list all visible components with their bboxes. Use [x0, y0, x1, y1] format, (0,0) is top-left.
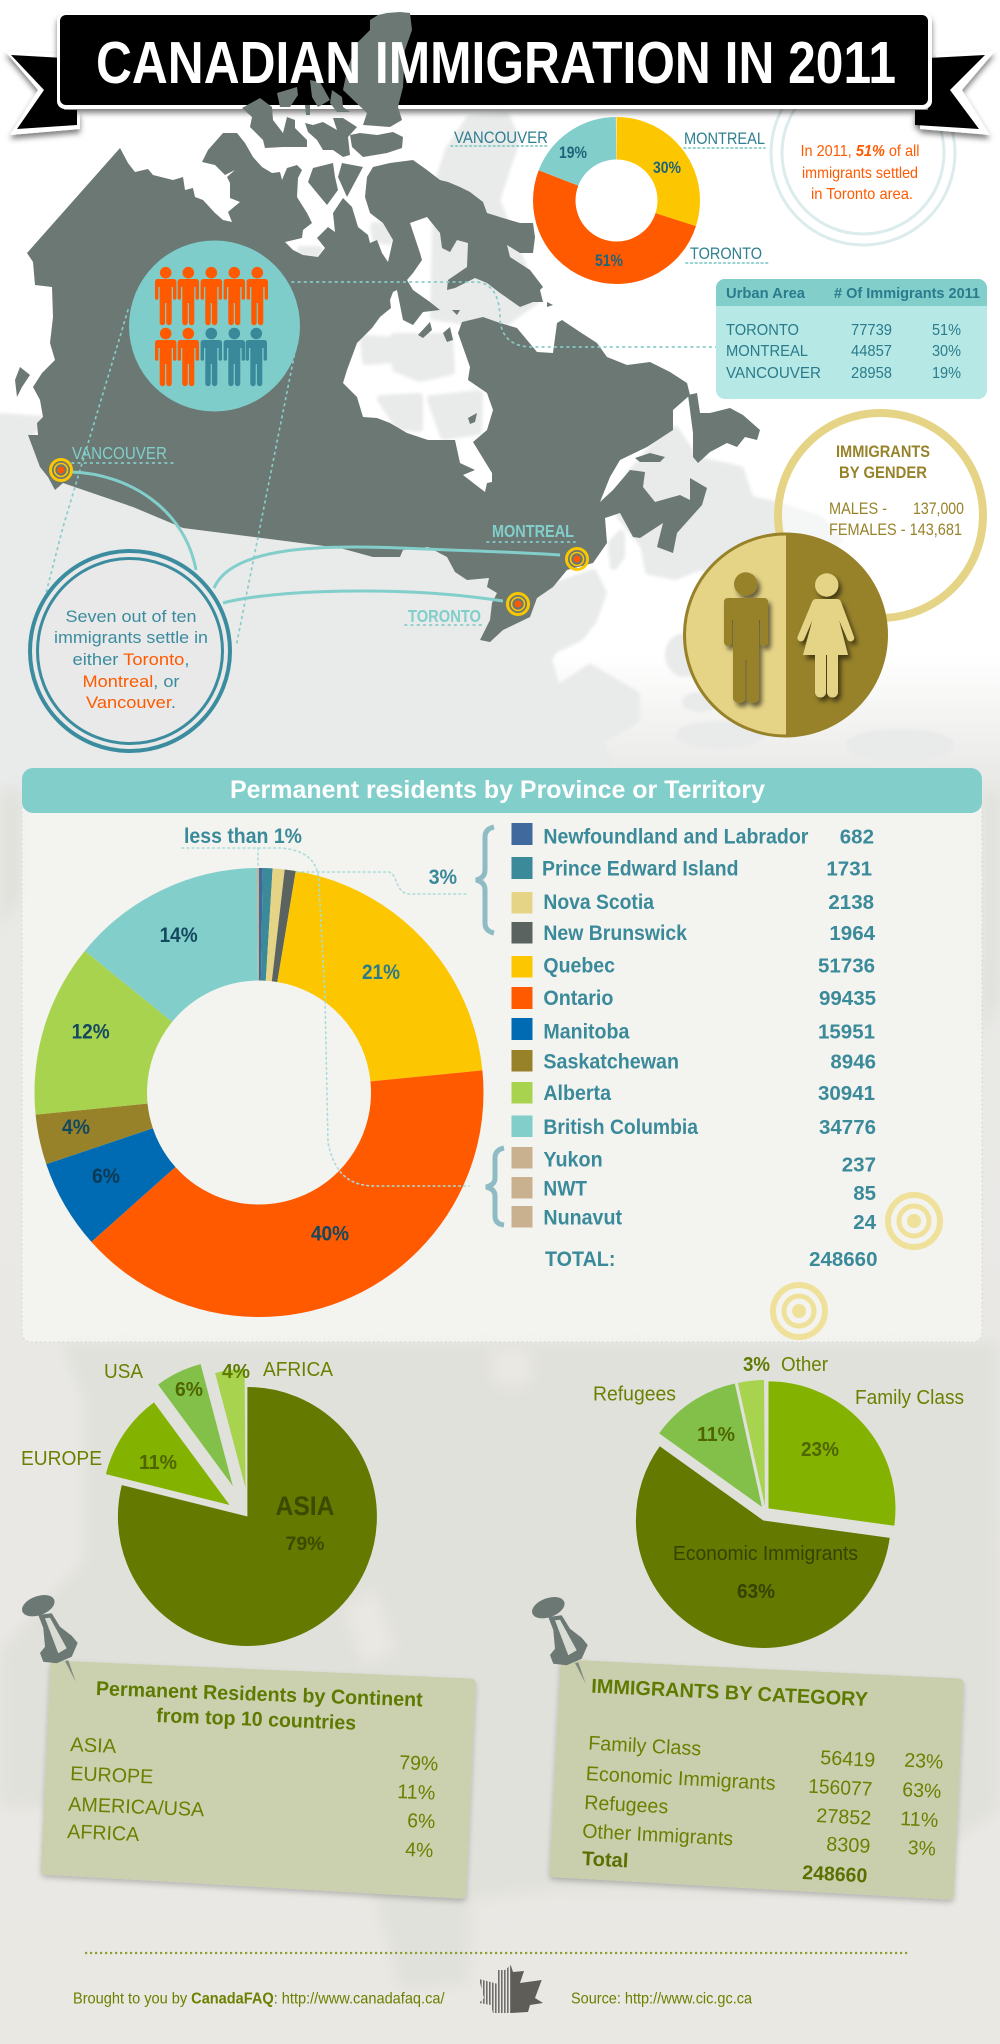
- legend names: Manitoba: [543, 1021, 630, 1044]
- note card: continents: [46, 1665, 471, 1894]
- gender icons disc: [684, 534, 888, 736]
- legend names: Nunavut: [543, 1207, 622, 1230]
- city labels on map: TORONTO: [408, 606, 481, 626]
- category pie labels: Family Class: [855, 1387, 964, 1409]
- small slice labels: 3%: [429, 866, 457, 889]
- legend names: Prince Edward Island: [542, 858, 738, 881]
- legend names: Alberta: [543, 1082, 611, 1105]
- note card: categories: 23%: [904, 1750, 944, 1774]
- title banner: [5, 13, 995, 135]
- footer credit: Brought to you by CanadaFAQ: http://www.canadafaq.ca/: [73, 1991, 445, 2008]
- continent pie labels: 11%: [139, 1452, 177, 1474]
- slice: Africa: [186, 1428, 305, 1548]
- legend names: NWT: [543, 1178, 587, 1200]
- province donut chart: [91, 924, 427, 1261]
- gender ring: IMMIGRANTS: [836, 442, 930, 461]
- slice: Other: [702, 1443, 828, 1569]
- Ellesmere Island: [343, 12, 412, 127]
- donut percent labels: 14%: [160, 924, 198, 947]
- legend names: TOTAL:: [545, 1248, 615, 1271]
- note card: categories: Other Immigrants: [582, 1821, 734, 1850]
- table: urban areas: Urban Area: [726, 285, 806, 302]
- gender ring: [778, 413, 983, 618]
- callout ring: 51% in Toronto: In 2011, 51% of all: [800, 143, 920, 160]
- category pie labels: 11%: [697, 1424, 735, 1446]
- category pie labels: 23%: [801, 1439, 839, 1461]
- Devon Island: [350, 132, 403, 157]
- legend names: Ontario: [543, 987, 613, 1010]
- icon: male figure: [724, 572, 768, 703]
- note card: categories: Refugees: [584, 1792, 669, 1818]
- city labels on map: VANCOUVER: [72, 443, 167, 463]
- Newfoundland: [688, 393, 760, 463]
- donut labels: 30%: [653, 158, 681, 177]
- Anticosti Island: [635, 453, 665, 462]
- category pie labels: [593, 1354, 964, 1603]
- table: urban areas: 30%: [932, 343, 961, 360]
- Somerset Island: [338, 163, 363, 197]
- donut percent labels: 12%: [72, 1021, 110, 1044]
- note card: categories: [554, 1664, 959, 1895]
- three teal people: [201, 328, 267, 386]
- legend names: British Columbia: [543, 1116, 698, 1139]
- note card: continents: EUROPE: [70, 1763, 154, 1788]
- panel heading: [22, 768, 982, 813]
- people icon circle: [129, 240, 300, 412]
- seven out of ten callout ring: Montreal , or: [82, 672, 180, 691]
- note card: continents: 11%: [397, 1781, 436, 1805]
- legend names: [542, 825, 808, 1271]
- decorative pale targets: [773, 1195, 940, 1337]
- legend names: Newfoundland and Labrador: [543, 825, 808, 848]
- city target markers: [50, 460, 588, 614]
- leader lines: [182, 848, 469, 1186]
- donut labels: VANCOUVER: [454, 128, 548, 147]
- legend names: Quebec: [543, 954, 615, 977]
- icon: female figure: [797, 573, 854, 698]
- legend names: New Brunswick: [543, 922, 687, 945]
- continent pie labels: 4%: [222, 1361, 250, 1383]
- legend values: 15951: [818, 1021, 875, 1044]
- note card: continents: Permanent Residents by Continent: [96, 1678, 423, 1711]
- donut labels: 19%: [559, 143, 587, 162]
- gender ring: FEMALES - 143,681: [829, 520, 962, 539]
- note card: categories: 8309: [826, 1834, 871, 1858]
- table: urban areas: [716, 279, 987, 399]
- legend values: 2138: [828, 891, 874, 914]
- Prince of Wales Island: [308, 163, 338, 205]
- legend values: 24: [853, 1211, 877, 1234]
- legend values: 85: [853, 1182, 876, 1205]
- donut labels: [451, 128, 768, 270]
- continent pie labels: 79%: [286, 1534, 325, 1555]
- donut percent labels: 4%: [62, 1116, 90, 1139]
- legend values: 30941: [818, 1082, 875, 1105]
- category pie labels: Economic Immigrants: [673, 1543, 858, 1565]
- panel heading: Permanent residents by Province or Territory: [230, 776, 765, 804]
- table: urban areas: 77739: [851, 322, 892, 339]
- note card: categories: 63%: [902, 1779, 942, 1803]
- slice: Family Class: [705, 1445, 832, 1572]
- small arctic islands: [277, 87, 298, 107]
- panel: permanent residents by province: [22, 768, 982, 1342]
- callout ring: 51% in Toronto: [771, 61, 955, 245]
- legend values: 1731: [826, 858, 872, 881]
- note card: categories: 248660: [802, 1862, 868, 1887]
- table: urban areas: TORONTO: [726, 322, 799, 339]
- slice: Europe: [166, 1441, 293, 1569]
- city labels on map: MONTREAL: [492, 521, 574, 541]
- callout ring: 51% in Toronto: immigrants settled: [802, 165, 918, 182]
- legend names: Saskatchewan: [543, 1050, 679, 1074]
- panel body: [22, 800, 982, 1342]
- note card: categories: 56419: [820, 1747, 876, 1772]
- callout ring: 51% in Toronto: in Toronto area.: [811, 186, 913, 203]
- slice: Asia: [183, 1452, 312, 1581]
- legend values: 248660: [809, 1248, 878, 1271]
- continent pie labels: EUROPE: [21, 1448, 102, 1470]
- note card: continents: 79%: [399, 1752, 439, 1776]
- donut percent labels: 6%: [92, 1165, 120, 1188]
- continent pie labels: USA: [104, 1361, 144, 1383]
- legend values: 99435: [819, 987, 876, 1010]
- note card: continents: from top 10 countries: [156, 1705, 357, 1735]
- continent pie labels: AFRICA: [263, 1359, 334, 1381]
- slice: Economic Immigrants: [700, 1457, 827, 1584]
- note card: categories: 11%: [900, 1808, 939, 1832]
- city labels on map: [72, 443, 574, 626]
- legend values: 237: [842, 1153, 876, 1176]
- banner bar: [57, 13, 932, 109]
- legend values: 1964: [829, 922, 876, 945]
- table: urban areas: 44857: [851, 343, 892, 360]
- category pie labels: 63%: [737, 1581, 775, 1603]
- pie chart: categories: [699, 1443, 832, 1584]
- note card: categories: IMMIGRANTS BY CATEGORY: [591, 1676, 869, 1711]
- continent pie labels: [21, 1359, 334, 1555]
- category pie labels: 3%: [743, 1354, 770, 1376]
- gender ring: 137,000: [913, 499, 964, 518]
- category pie labels: Other: [781, 1354, 828, 1376]
- seven out of ten callout ring: immigrants settle in: [54, 628, 208, 647]
- legend values: [809, 825, 878, 1271]
- icon: push pin left: [19, 1591, 78, 1682]
- legend names: Nova Scotia: [543, 891, 654, 914]
- donut labels: TORONTO: [690, 244, 762, 263]
- pie chart: continents: [166, 1423, 312, 1581]
- note card: continents: 4%: [405, 1839, 434, 1862]
- note card: categories: 27852: [816, 1805, 872, 1830]
- donut percent labels: 21%: [362, 961, 400, 984]
- note card: continents: AMERICA/USA: [68, 1794, 205, 1821]
- legend swatches: [512, 823, 532, 1228]
- table: urban areas: # Of Immigrants 2011: [834, 285, 980, 302]
- small slice labels: [184, 825, 457, 889]
- donut labels: 51%: [595, 251, 623, 270]
- note card: continents: AFRICA: [67, 1821, 140, 1846]
- note card: categories: Economic Immigrants: [585, 1763, 776, 1795]
- connector dotted lines: [45, 282, 716, 647]
- note card: categories: Family Class: [588, 1733, 702, 1760]
- donut chart: urban area share: [554, 138, 679, 263]
- icon: push pin right: [529, 1593, 588, 1684]
- seven orange people: [155, 267, 268, 386]
- Melville Island: [242, 98, 307, 148]
- table: urban areas: 51%: [932, 322, 961, 339]
- legend values: 34776: [819, 1116, 876, 1139]
- note card: continents: 6%: [407, 1810, 436, 1833]
- legend names: Yukon: [543, 1148, 603, 1171]
- slice: USA: [170, 1423, 296, 1549]
- Coats Island: [443, 327, 453, 342]
- donut percent labels: [62, 924, 400, 1246]
- note card: categories: 156077: [808, 1776, 873, 1801]
- slice: Refugees: [699, 1444, 825, 1570]
- braces: [476, 827, 504, 1225]
- seven out of ten callout ring: [30, 551, 230, 751]
- note card: categories: 3%: [907, 1837, 937, 1860]
- legend values: 8946: [830, 1050, 876, 1074]
- seven out of ten callout ring: Vancouver .: [86, 693, 176, 712]
- gender ring: MALES -: [829, 499, 887, 518]
- table: urban areas: MONTREAL: [726, 343, 808, 360]
- table: urban areas: 28958: [851, 365, 892, 382]
- map of Canada: [15, 12, 760, 642]
- Southampton Island: [418, 322, 432, 338]
- donut percent labels: 40%: [311, 1223, 349, 1246]
- table: urban areas: 19%: [932, 365, 961, 382]
- seven out of ten callout ring: either Toronto ,: [72, 650, 190, 669]
- Bathurst Island: [305, 118, 357, 157]
- footer rule: [85, 1952, 909, 1954]
- footer source: Source: http://www.cic.gc.ca: [571, 1991, 752, 2008]
- continent pie labels: 6%: [175, 1379, 203, 1401]
- table: urban areas: VANCOUVER: [726, 365, 821, 382]
- donut labels: MONTREAL: [684, 129, 765, 148]
- curved connectors: [72, 472, 560, 603]
- small slice labels: less than 1%: [184, 825, 302, 848]
- ribbon tails: [5, 51, 995, 135]
- continent pie labels: ASIA: [276, 1491, 334, 1521]
- icon: maple leaf: [479, 1965, 543, 2013]
- note card: categories: Total: [581, 1848, 629, 1872]
- seven out of ten callout ring: Seven out of ten: [66, 607, 196, 626]
- legend values: 682: [840, 825, 874, 848]
- note card: continents: ASIA: [70, 1734, 117, 1758]
- legend values: 51736: [818, 954, 875, 977]
- gender ring: BY GENDER: [839, 463, 927, 482]
- Haida Gwaii: [15, 367, 30, 397]
- category pie labels: Refugees: [593, 1384, 676, 1406]
